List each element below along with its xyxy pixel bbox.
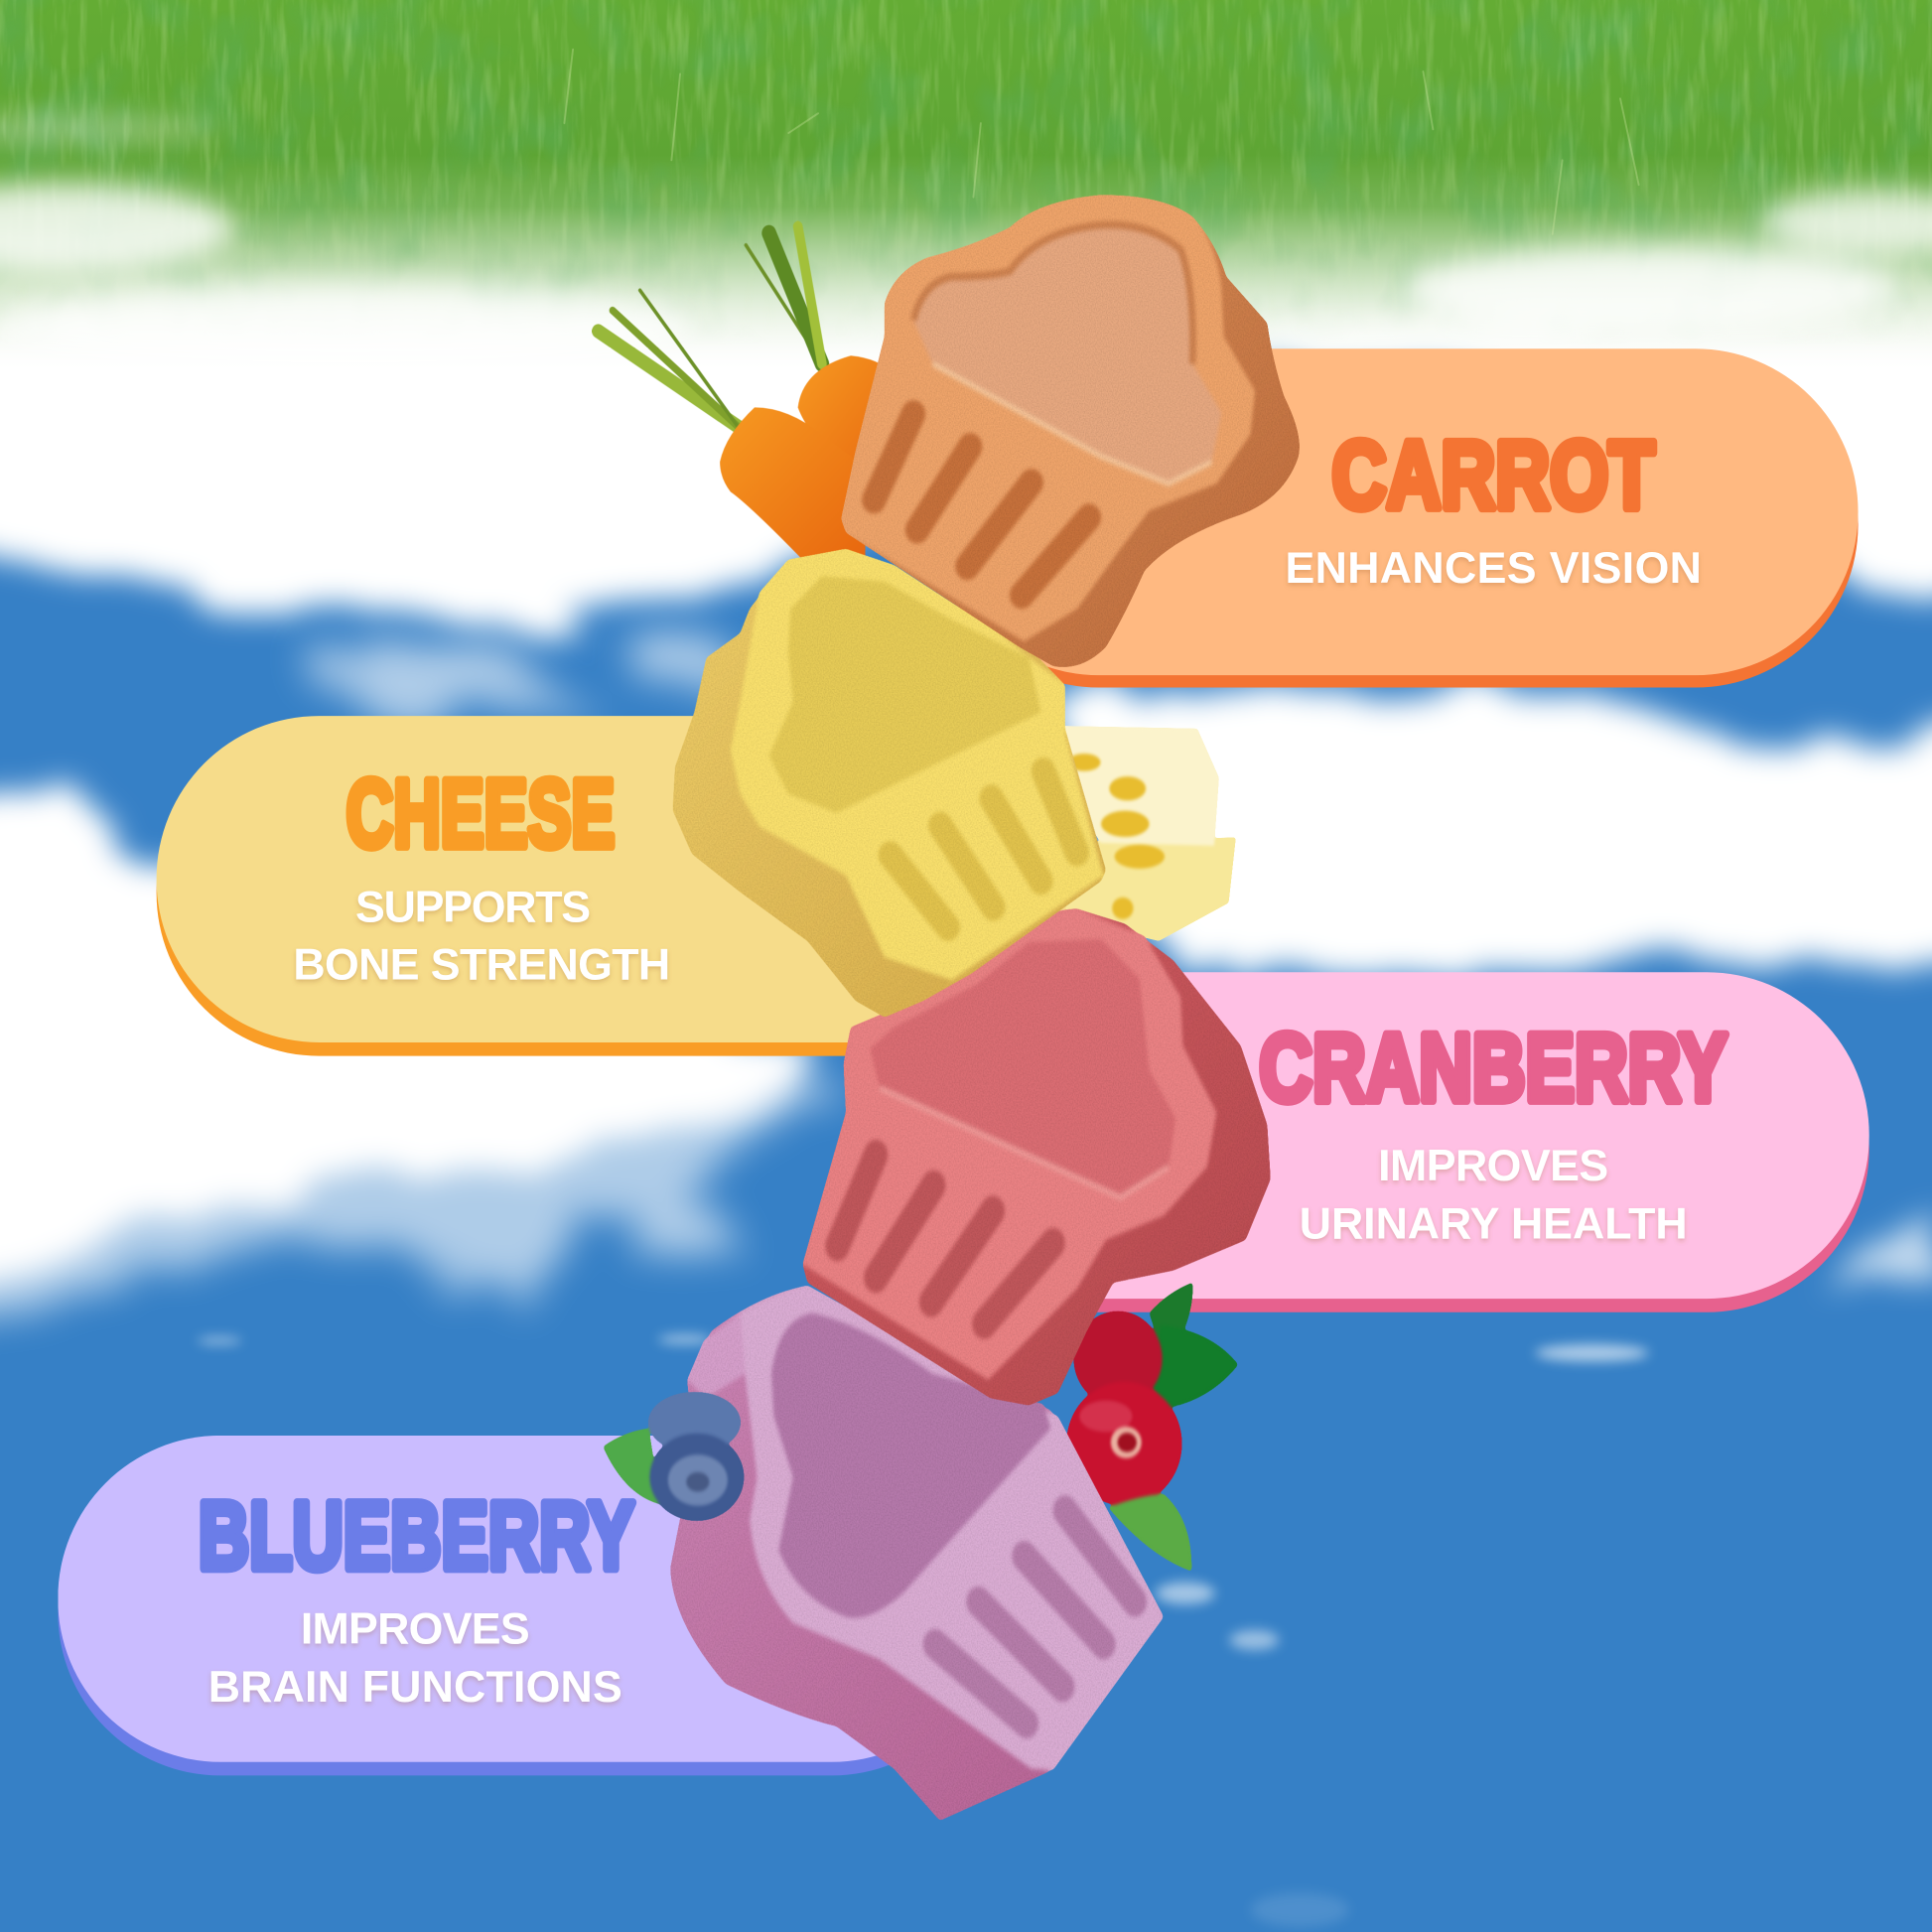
icon: cranberries and leaves [1066, 1283, 1238, 1572]
wispy clouds [198, 1334, 1649, 1927]
benefit: cheese: SUPPORTS [355, 883, 591, 931]
icon: blueberries and mint leaf [603, 1392, 744, 1521]
panel: blueberry [58, 1436, 995, 1775]
benefit: carrot: ENHANCES VISION [1285, 544, 1702, 593]
muffin: cheese [673, 549, 1106, 1018]
muffin: cranberry [803, 908, 1271, 1406]
clouds [0, 123, 1932, 1294]
heading: cranberry: CRANBERRY [1259, 1013, 1727, 1121]
grass [0, 0, 1932, 369]
muffin: blueberry [670, 1286, 1164, 1821]
benefit: blueberry: IMPROVES [301, 1605, 530, 1654]
cloud haze [0, 634, 850, 1349]
cloud puffs over grass [0, 114, 1932, 368]
panel: blueberry: BRAIN FUNCTIONS [208, 1663, 622, 1712]
icon: cheese blocks [1057, 726, 1236, 941]
heading: blueberry: BLUEBERRY [199, 1481, 634, 1589]
panel: cheese: BONE STRENGTH [293, 941, 670, 990]
panel: carrot [936, 348, 1859, 688]
panel: cranberry: URINARY HEALTH [1300, 1199, 1688, 1248]
icon: carrots [598, 226, 895, 560]
muffin: carrot [841, 195, 1300, 667]
heading: cheese: CHEESE [346, 759, 615, 868]
panel: cheese [157, 716, 1093, 1056]
heading: carrot: CARROT [1332, 420, 1655, 528]
benefit: cranberry: IMPROVES [1378, 1142, 1608, 1190]
panel: cranberry [936, 972, 1869, 1312]
